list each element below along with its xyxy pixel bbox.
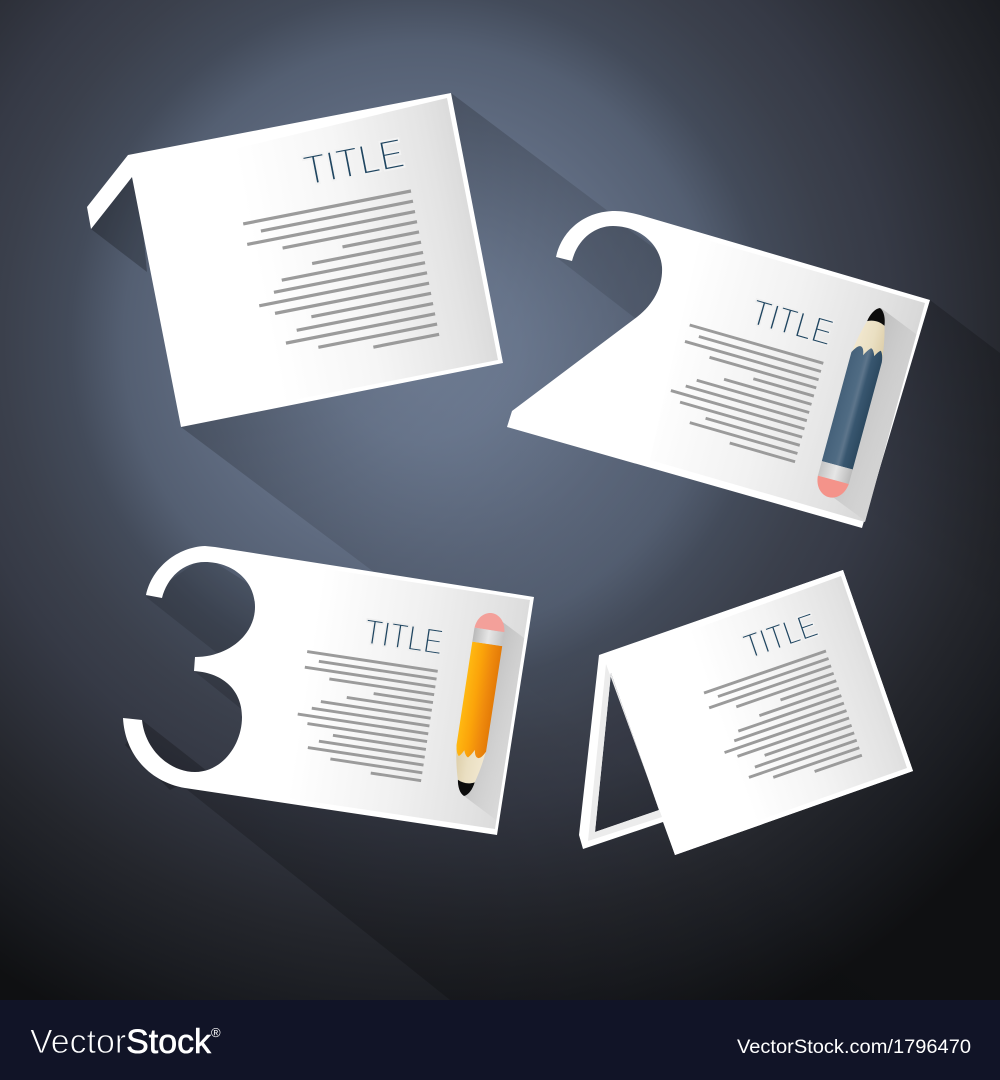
card 4 title: TITLE (739, 606, 823, 667)
card 4 text lines (704, 651, 862, 797)
card 2 text lines (661, 325, 823, 462)
card 3 pencil shadow (464, 622, 524, 812)
footer image id: VectorStock.com/1796470 (737, 1037, 971, 1058)
card 1 text lines (243, 191, 439, 367)
card 3 text lines (291, 652, 438, 781)
registered mark: ® (211, 1025, 221, 1040)
card 3 title: TITLE (362, 611, 446, 663)
card 3: number three (123, 546, 534, 835)
footer bar (0, 1000, 1000, 1080)
card 4: number four (579, 570, 913, 855)
card 2 pencil shadow (834, 308, 916, 521)
card 2: number two (507, 211, 930, 528)
icon: blue pencil (813, 304, 895, 501)
icon: orange pencil (449, 611, 507, 798)
long shadows (91, 93, 1000, 1000)
card 2 title: TITLE (747, 291, 838, 354)
card 1 title: TITLE (300, 129, 408, 194)
card 1: number one (87, 93, 503, 427)
footer logo: VectorStock (30, 1023, 212, 1061)
